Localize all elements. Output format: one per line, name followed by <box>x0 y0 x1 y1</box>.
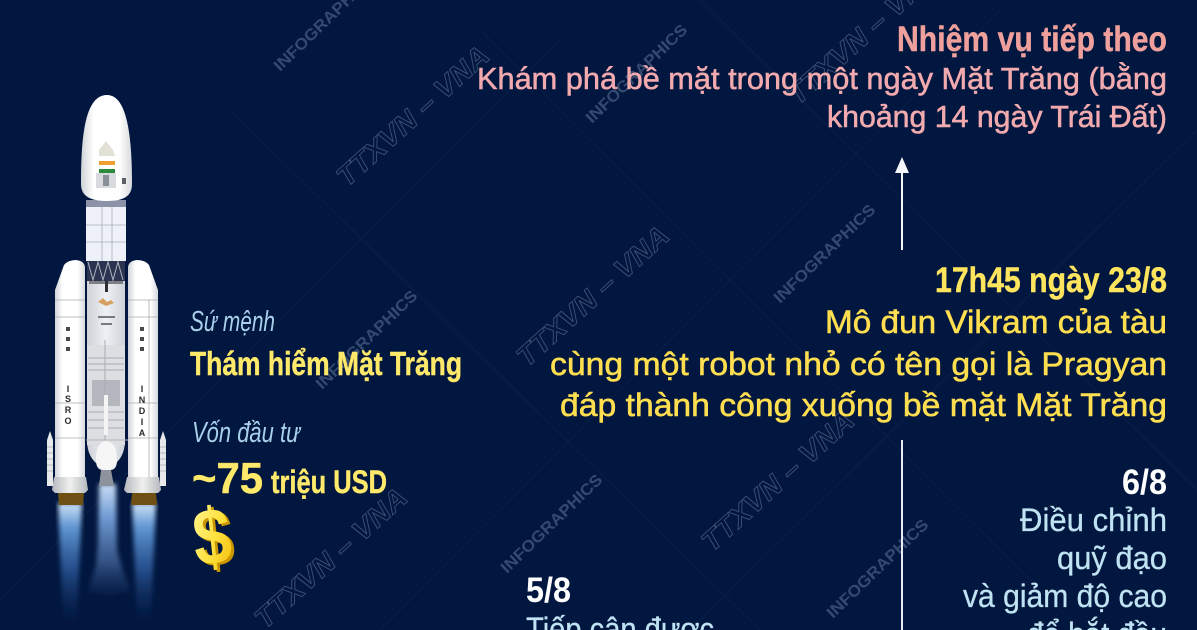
watermarks <box>248 0 946 630</box>
next mission description: Khám phá bề mặt trong một ngày Mặt Trăng (bằng <box>477 61 1167 96</box>
watermarks: TTXVN – VNA <box>330 40 495 192</box>
landing description: đáp thành công xuống bề mặt Mặt Trăng <box>560 387 1167 423</box>
right booster: I <box>141 384 143 394</box>
landing description: cùng một robot nhỏ có tên gọi là Pragyan <box>550 346 1167 382</box>
left booster: S <box>65 394 71 404</box>
watermarks: INFOGRAPHICS <box>824 516 932 622</box>
mission value: Thám hiểm Mặt Trăng <box>190 345 462 382</box>
orbit adjustment description <box>963 502 1167 630</box>
icon: dollar sign: $ <box>191 492 239 585</box>
interstage truss <box>87 261 125 281</box>
landing description: Mô đun Vikram của tàu <box>825 304 1167 340</box>
central engine <box>86 440 128 486</box>
arrow: up to next mission <box>895 157 909 250</box>
left booster: R <box>65 405 72 415</box>
orbit adjustment description: quỹ đạo <box>1057 540 1167 576</box>
investment value <box>192 454 387 503</box>
next mission description <box>477 61 1167 134</box>
left booster: I <box>67 384 69 394</box>
date heading 5/8: 5/8 <box>526 571 571 610</box>
left booster <box>52 260 88 505</box>
rocket illustration <box>47 95 166 625</box>
watermarks: TTXVN – VNA <box>510 220 675 372</box>
left booster: O <box>64 416 72 426</box>
strap-on rods <box>47 431 166 486</box>
core stage <box>87 280 125 466</box>
icon: dollar sign: $ <box>188 490 236 583</box>
watermarks: INFOGRAPHICS <box>313 287 421 393</box>
watermarks: INFOGRAPHICS <box>583 21 691 127</box>
milestone: 5/8 <box>526 571 714 630</box>
milestone: 6/8 <box>963 463 1167 630</box>
investment value: ~75 <box>192 454 263 503</box>
investment value: triệu USD <box>271 464 387 500</box>
mission info <box>188 306 462 585</box>
landing description <box>550 304 1167 423</box>
orbit adjustment description: và giảm độ cao <box>963 578 1167 614</box>
next mission text <box>477 20 1167 134</box>
rocket exhaust flames <box>58 484 156 625</box>
right booster: A <box>139 428 146 438</box>
watermarks: TTXVN – VNA <box>695 405 860 557</box>
investment label: Vốn đầu tư <box>192 417 302 449</box>
date heading 6/8: 6/8 <box>1122 463 1167 502</box>
upper stage <box>86 200 126 261</box>
watermarks: INFOGRAPHICS <box>771 201 879 307</box>
right booster: I <box>141 417 143 427</box>
watermarks: INFOGRAPHICS <box>498 471 606 577</box>
date heading 23/8: 17h45 ngày 23/8 <box>935 261 1167 300</box>
milestone: 23/8 landing <box>550 261 1167 423</box>
payload fairing with flag <box>81 95 132 201</box>
next mission description: khoảng 14 ngày Trái Đất) <box>827 99 1167 134</box>
orbit adjustment description: Điều chỉnh <box>1020 502 1167 538</box>
mission label: Sứ mệnh <box>190 306 275 338</box>
right booster <box>124 260 161 505</box>
timeline line <box>901 440 903 630</box>
right booster: D <box>139 406 146 416</box>
right booster: N <box>139 395 145 405</box>
